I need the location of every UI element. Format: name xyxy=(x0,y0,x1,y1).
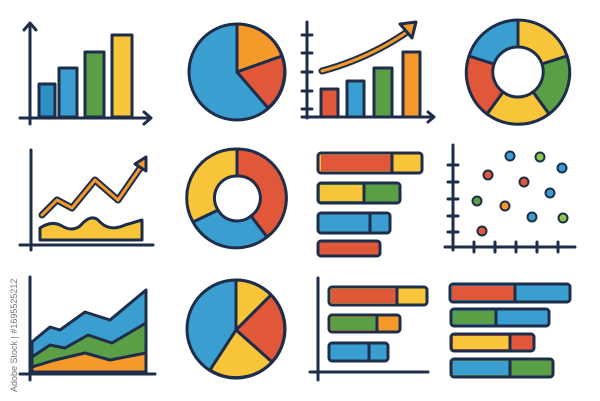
icon: donut chart 5 segments xyxy=(466,20,570,124)
icon: vertical bar chart xyxy=(20,23,151,124)
icon: line chart with area xyxy=(20,150,153,250)
icon: horizontal bar chart with axis xyxy=(310,278,428,380)
watermark text: Adobe Stock | #1695525212 xyxy=(9,279,19,392)
icon: pie chart 2 xyxy=(187,280,285,378)
icon: growth bar chart with arrow xyxy=(302,22,434,122)
icon: pie chart 1 xyxy=(189,24,285,120)
icon: stacked horizontal bars xyxy=(318,153,422,256)
icon: scatter plot xyxy=(445,145,575,252)
icon: stacked area chart xyxy=(20,277,155,380)
icon: two-tone horizontal bars xyxy=(450,284,570,377)
icon: donut chart 3 segments xyxy=(187,149,286,248)
